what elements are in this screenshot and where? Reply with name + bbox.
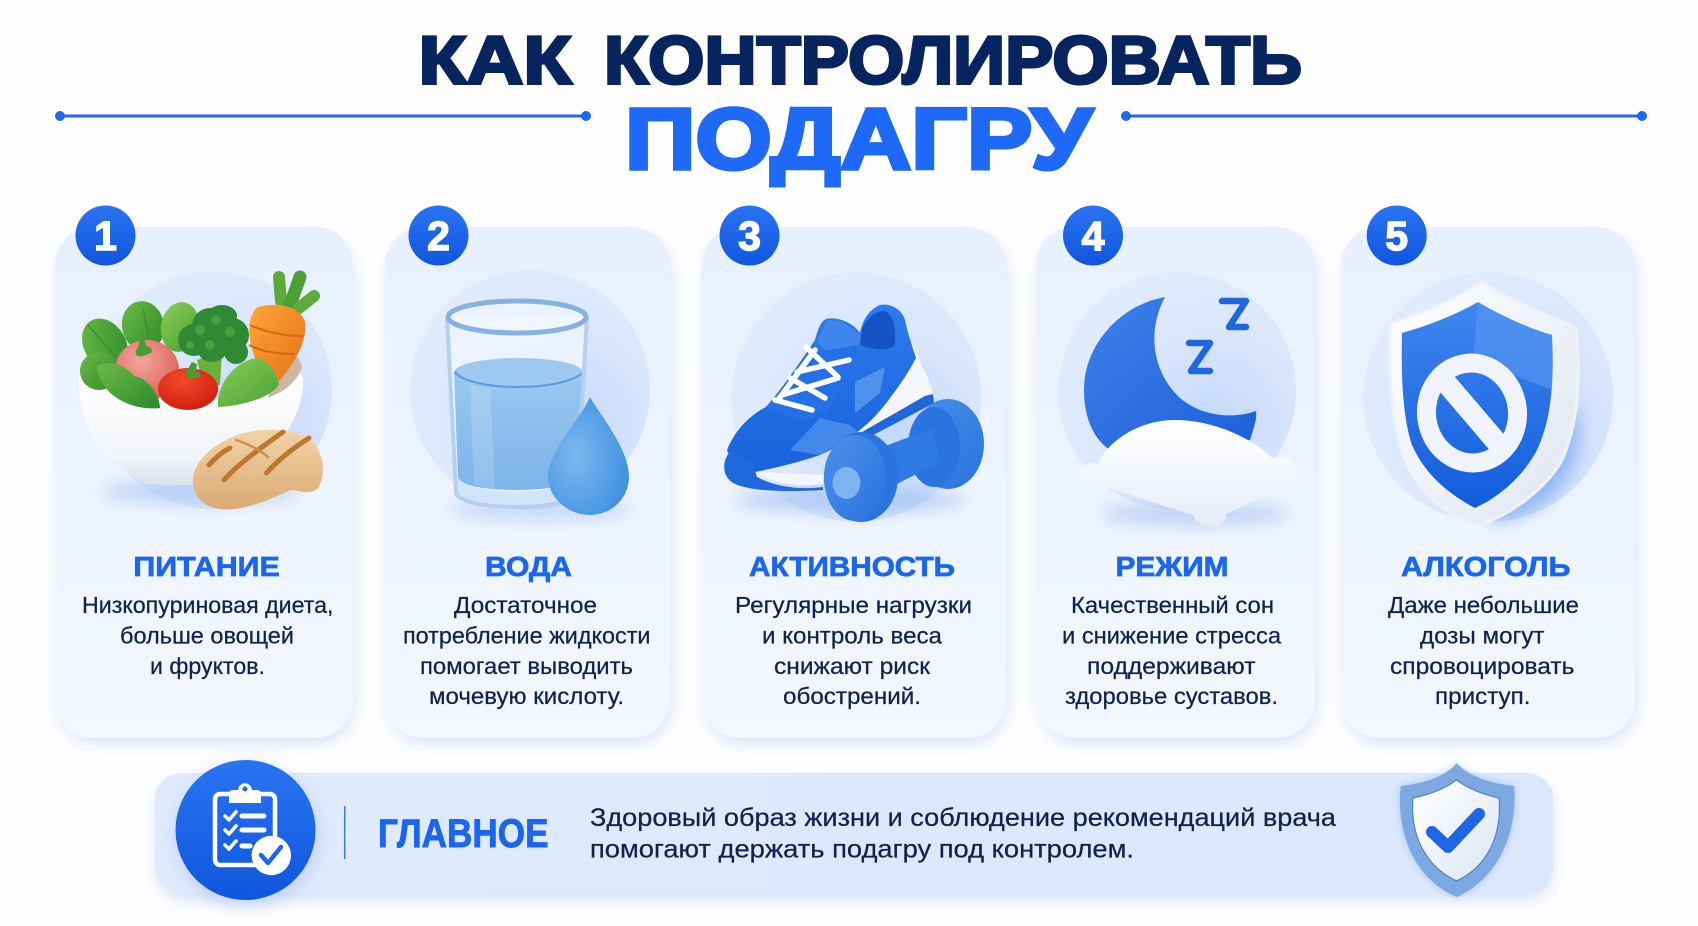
text режим: поддерживают [1087,653,1256,679]
panel: главное [155,760,1553,907]
left title rule [55,111,591,121]
icon: shield with prohibition sign [1390,282,1579,526]
dumbbell [824,399,984,522]
text алкоголь: дозы могут [1420,622,1545,648]
title: ПОДАГРУ [625,92,1094,188]
right title rule [1121,111,1647,121]
text питание: больше овощей [120,622,294,648]
badge 4 [1063,206,1123,266]
text вода: потребление жидкости [403,622,650,648]
chicken [193,430,323,509]
divider [344,806,346,859]
panel: алкоголь [1341,206,1637,744]
carrot [249,277,314,384]
icon: moon, zzz and pillow [1079,297,1295,526]
text активность: обострений. [783,683,921,709]
text активность: снижают риск [774,653,931,679]
badge 2 [408,206,468,266]
text активность: Регулярные нагрузки [735,592,972,618]
heading режим: РЕЖИМ [1116,551,1228,582]
text питание [82,592,334,679]
text алкоголь: Даже небольшие [1388,592,1579,618]
text вода: мочевую кислоту. [429,683,624,709]
title: КАК [418,22,572,98]
panel: питание [55,206,354,744]
text режим: Качественный сон [1071,592,1274,618]
panel: режим [1036,206,1317,744]
badge 3: 3 [738,213,761,259]
title: КОНТРОЛИРОВАТЬ [604,22,1302,98]
broccoli [178,308,249,390]
icon: glass of water and drop [447,301,632,520]
text питание: и фруктов. [150,653,265,679]
badge 1 [76,206,136,266]
badge 2: 2 [427,213,450,259]
icon: bowl with vegetables and chicken [73,277,323,509]
heading главное: ГЛАВНОЕ [378,812,548,856]
lower leaf [97,363,160,408]
sneaker [724,305,934,491]
badge 1: 1 [94,213,117,259]
icon: clipboard in circle [176,760,318,907]
panel: активность [702,206,1008,744]
text алкоголь [1388,592,1579,709]
text вода: помогает выводить [420,653,633,679]
text активность [735,592,972,709]
heading активность: АКТИВНОСТЬ [749,551,955,582]
icon: shield with check mark [1400,763,1515,897]
text питание: Низкопуриновая диета, [82,592,334,618]
right leaf [218,358,279,407]
text режим [1062,592,1281,709]
text активность: и контроль веса [762,622,942,648]
text алкоголь: спровоцировать [1390,653,1575,679]
badge 5 [1367,206,1427,266]
tomato [158,362,218,410]
text главное [590,804,1336,864]
heading вода: ВОДА [485,551,572,582]
apple [115,335,179,400]
text вода: Достаточное [454,592,597,618]
text вода [403,592,650,709]
text режим: здоровье суставов. [1065,683,1278,709]
badge 4: 4 [1082,213,1105,259]
badge 5: 5 [1385,213,1408,259]
text режим: и снижение стресса [1062,622,1281,648]
text алкоголь: приступ. [1435,683,1530,709]
icon: sneaker and dumbbell [724,305,984,522]
heading алкоголь: АЛКОГОЛЬ [1401,551,1570,582]
text главное: помогают держать подагру под контролем. [590,836,1134,864]
panel: вода [385,206,672,744]
text главное: Здоровый образ жизни и соблюдение рекомендаций врача [590,804,1336,832]
leaves [73,298,237,390]
title [418,22,1302,188]
heading питание: ПИТАНИЕ [133,551,280,582]
badge 3 [720,206,780,266]
